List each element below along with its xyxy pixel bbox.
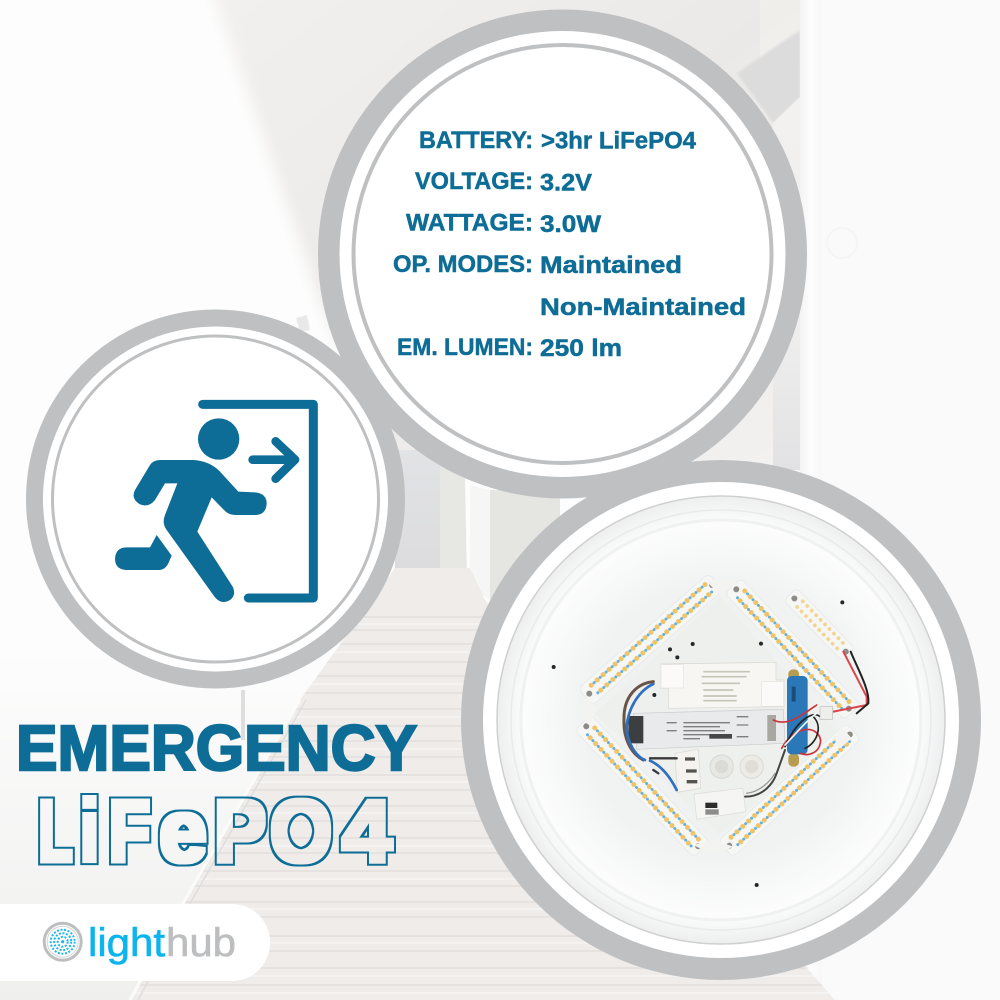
lamp electronics <box>552 578 868 887</box>
spec: operating modes: Non-Maintained <box>540 294 746 321</box>
subtitle: LiFePO4 outlined: L <box>39 783 72 880</box>
wires <box>624 652 868 797</box>
panel: emergency exit icon circle <box>26 310 405 688</box>
spec: battery: BATTERY: <box>419 127 533 154</box>
icon: running person at exit door <box>115 404 313 602</box>
icon: running body <box>134 460 267 602</box>
spec: emergency lumen <box>397 334 622 362</box>
spec: emergency lumen: EM. LUMEN: <box>397 334 533 361</box>
spec: voltage <box>415 168 592 196</box>
spec: operating modes: OP. MODES: <box>393 251 533 278</box>
spec: voltage: 3.2V <box>540 170 592 196</box>
logo icon <box>44 923 81 960</box>
subtitle: LiFePO4 outlined: 4 <box>342 783 392 880</box>
lamp base disc <box>497 496 945 944</box>
centre plate <box>595 597 837 835</box>
subtitle: LiFePO4 outlined: e <box>159 783 207 880</box>
logo wordmark: hub <box>166 921 236 965</box>
mounting holes <box>552 600 844 887</box>
subtitle: LiFePO4 outlined: P <box>214 783 266 880</box>
LED driver box <box>661 662 784 708</box>
wire connector <box>820 707 833 719</box>
LED strips <box>575 573 861 857</box>
title: EMERGENCY: EMERGENCY <box>16 712 417 784</box>
emergency driver box <box>628 709 785 749</box>
spec: operating modes: Maintained <box>540 252 682 279</box>
terminal block <box>675 749 701 792</box>
spec: battery <box>419 127 697 154</box>
logo wordmark: light <box>88 921 165 965</box>
subtitle: LiFePO4 outlined: F <box>109 783 150 880</box>
spec: wattage: 3.0W <box>540 211 601 238</box>
spec: battery: >3hr LiFePO4 <box>541 128 697 154</box>
sensors <box>710 755 763 778</box>
strip corner connectors <box>579 578 852 855</box>
icon: exit arrow <box>253 441 295 479</box>
spec: wattage: WATTAGE: <box>406 210 533 236</box>
logo: lighthub badge <box>0 904 270 981</box>
spec: operating modes <box>393 251 746 321</box>
panel: product photo circle <box>461 460 981 980</box>
subtitle: LiFePO4 outlined: i <box>80 783 99 880</box>
battery <box>787 669 808 767</box>
icon: back foot <box>115 535 172 570</box>
floor with horizontal stripes <box>120 560 840 1000</box>
spec: wattage <box>406 210 601 238</box>
icon: door frame <box>203 404 313 598</box>
switch box <box>694 788 746 819</box>
panel: specifications circle <box>318 10 807 498</box>
subtitle: LiFePO4 outlined: O <box>270 783 332 880</box>
spec: emergency lumen: 250 lm <box>540 335 622 362</box>
spec: voltage: VOLTAGE: <box>415 168 533 195</box>
icon: head <box>198 418 239 460</box>
